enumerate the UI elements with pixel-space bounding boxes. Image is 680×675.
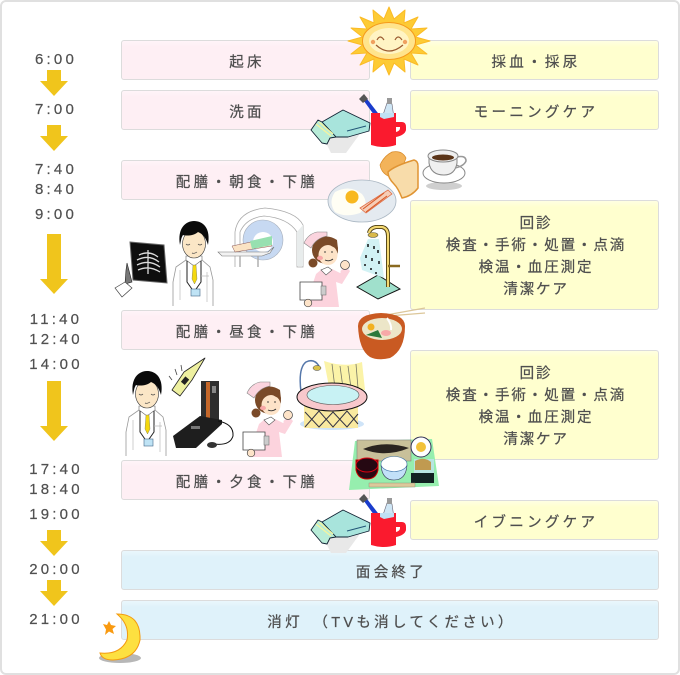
yellow box: afternoon rounds: 検温・血圧測定 (479, 410, 593, 426)
yellow box: blood and urine sampling (410, 40, 659, 80)
pink box: face washing: 洗面 (229, 104, 265, 120)
time: 14:00: 14:00 (29, 356, 83, 373)
arrow: 7:00 to 7:40 (40, 125, 68, 151)
yellow box: morning rounds (410, 200, 659, 310)
icon: doctor (173, 221, 213, 306)
yellow box: evening care (410, 500, 659, 540)
pink box: lunch: 配膳・昼食・下膳 (176, 324, 318, 340)
arrow: 6:00 to 7:00 (40, 70, 68, 96)
yellow box: morning rounds: 清潔ケア (503, 282, 569, 298)
icon: blood pressure monitor (173, 381, 233, 448)
time: 21:00: 21:00 (29, 611, 83, 628)
icon: bathtub (297, 361, 367, 430)
pink box: face washing (121, 90, 370, 130)
time: 20:00: 20:00 (29, 561, 83, 578)
time: 7:40: 7:40 (35, 161, 77, 178)
arrow: 14:00 to 17:40 (40, 381, 68, 441)
yellow box: morning rounds: 検査・手術・処置・点滴 (446, 238, 626, 254)
yellow box: afternoon rounds: 検査・手術・処置・点滴 (446, 388, 626, 404)
yellow box: morning rounds: 回診 (520, 216, 552, 232)
pink box: wake up: 起床 (229, 54, 265, 70)
arrow: 19:00 to 20:00 (40, 530, 68, 556)
yellow box: afternoon rounds: 清潔ケア (503, 432, 569, 448)
icon: toast (380, 152, 418, 198)
arrow: 20:00 to 21:00 (40, 580, 68, 606)
time: 17:40: 17:40 (29, 461, 83, 478)
icon: crescent moon and star (99, 614, 141, 663)
pink box: dinner (121, 460, 370, 500)
time: 12:40: 12:40 (29, 331, 83, 348)
icon: shower (357, 227, 400, 299)
time: 9:00: 9:00 (35, 206, 77, 223)
pink box: lunch (121, 310, 370, 350)
time: 7:00: 7:00 (35, 101, 77, 118)
yellow box: morning rounds: 検温・血圧測定 (479, 260, 593, 276)
blue box: visiting hours end (121, 550, 659, 590)
yellow box: morning care: モーニングケア (474, 104, 598, 120)
blue box: lights out: 消灯 （TVも消してください） (267, 614, 516, 630)
pink box: breakfast (121, 160, 370, 200)
yellow box: afternoon rounds (410, 350, 659, 460)
icon: towel and toothbrush cup (evening) (311, 494, 406, 553)
icon: coffee cup and saucer (423, 150, 466, 190)
time: 18:40: 18:40 (29, 481, 83, 498)
yellow box: morning care (410, 90, 659, 130)
pink box: breakfast: 配膳・朝食・下膳 (176, 174, 318, 190)
time: 19:00: 19:00 (29, 506, 83, 523)
blue box: lights out (121, 600, 659, 640)
yellow box: blood and urine sampling: 採血・採尿 (492, 54, 580, 70)
icon: noodle bowl with chopsticks (358, 308, 425, 359)
icon: dinner tray (349, 437, 439, 490)
blue box: visiting hours end: 面会終了 (356, 564, 427, 580)
time: 8:40: 8:40 (35, 181, 77, 198)
time: 6:00: 6:00 (35, 51, 77, 68)
icon: smiling sun (348, 7, 430, 75)
pink box: dinner: 配膳・夕食・下膳 (176, 474, 318, 490)
icon: nurse (afternoon) (243, 382, 293, 457)
pink box: wake up (121, 40, 370, 80)
arrow: 9:00 to 11:40 (40, 234, 68, 294)
time: 11:40: 11:40 (30, 311, 82, 328)
icon: towel and toothbrush cup (morning) (311, 94, 406, 153)
icon: CT scanner (218, 208, 303, 267)
yellow box: evening care: イブニングケア (474, 514, 598, 530)
icon: nurse (morning) (300, 232, 350, 307)
icon: doctor (afternoon) (126, 371, 166, 456)
icon: thermometer (169, 358, 205, 396)
yellow box: afternoon rounds: 回診 (520, 366, 552, 382)
icon: chest x-ray (115, 242, 167, 297)
icon: fried egg and bacon plate (328, 180, 396, 222)
